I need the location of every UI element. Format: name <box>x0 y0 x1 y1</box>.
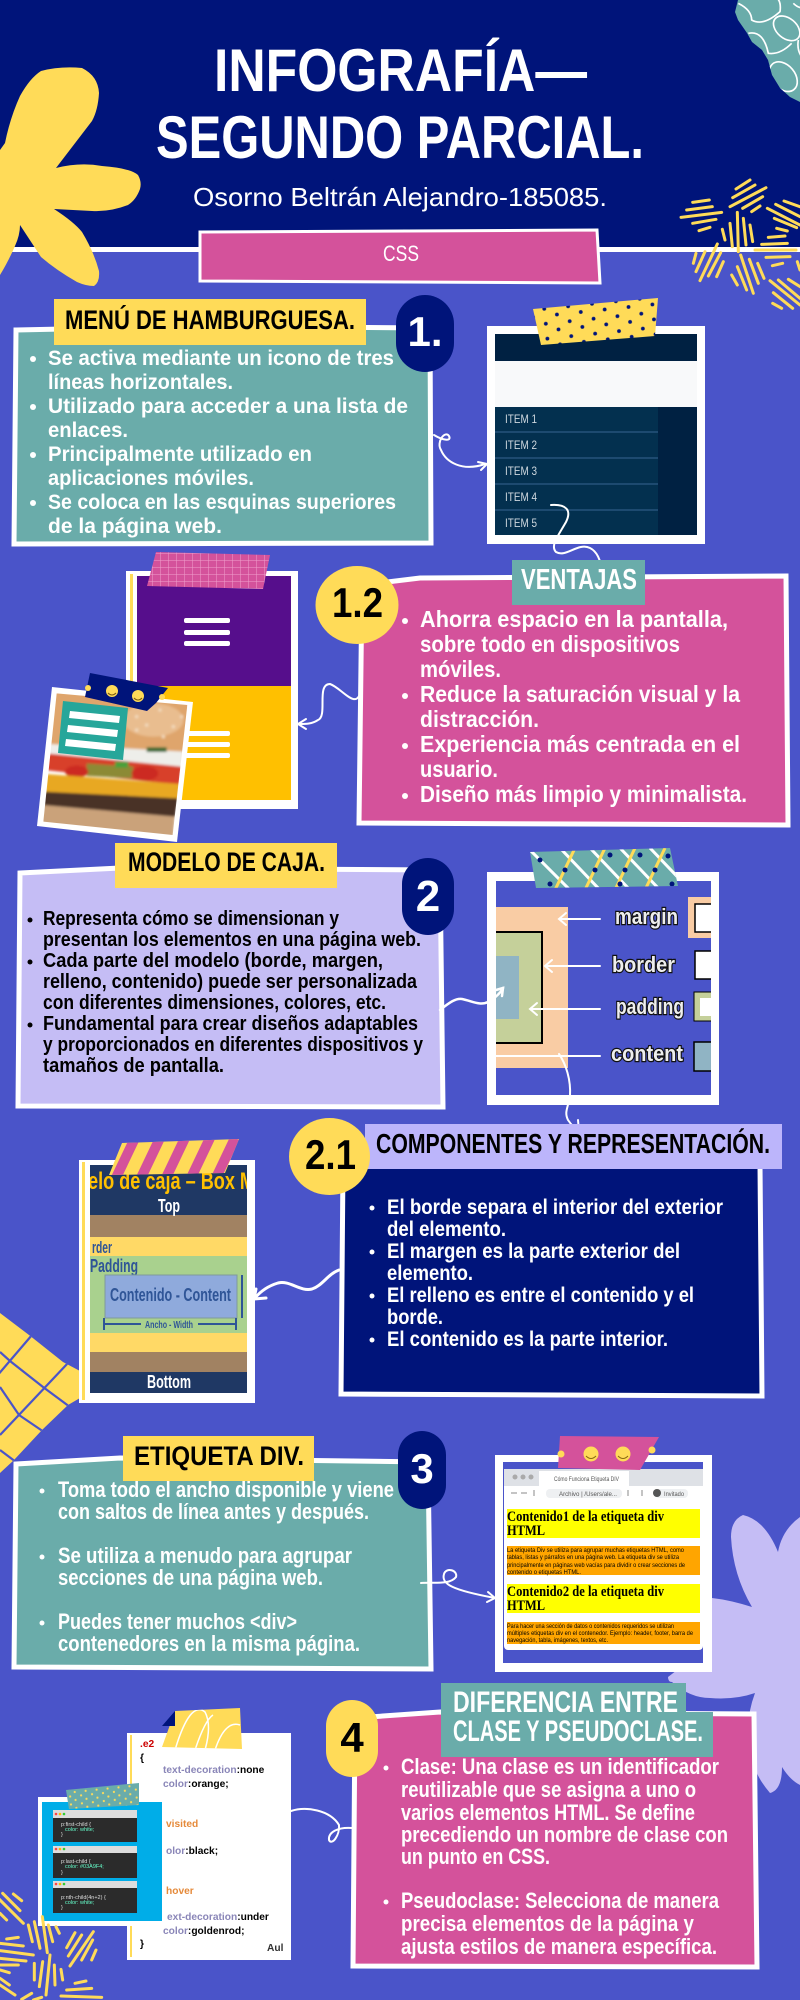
text: menú de hamburguesa bullets: de la página web. <box>48 515 222 538</box>
arrow: menu text to screenshot <box>434 434 487 470</box>
banner: CSS <box>200 230 600 283</box>
image: css code screenshot <box>127 1733 291 1960</box>
text: modelo de caja bullets: Representa cómo se dimensionan y <box>43 908 340 930</box>
decoration: yellow dashes bottom left <box>0 1893 102 2000</box>
image: box model table: Contenido - Content <box>110 1285 231 1305</box>
text: clase y pseudoclase bullets: ajusta estilos de manera específica. <box>401 1934 717 1959</box>
badge: 2.1: 2.1 <box>305 1131 356 1178</box>
image: browser screenshot of div: Cómo Funciona Etiqueta DIV <box>554 1477 619 1483</box>
text: etiqueta div bullets: con saltos de línea antes y después. <box>58 1499 369 1524</box>
text: componentes bullets: borde. <box>387 1306 443 1329</box>
text: clase y pseudoclase bullets: reutilizable que se asigna a uno o <box>401 1777 696 1802</box>
image: box model table: Bottom <box>147 1372 191 1392</box>
text: ventajas bullets: móviles. <box>420 656 501 682</box>
text: clase y pseudoclase bullets: Clase: Una clase es un identificador <box>401 1754 719 1779</box>
text: menú de hamburguesa bullets: enlaces. <box>48 419 128 442</box>
heading: componentes y representación <box>365 1124 782 1169</box>
text: menú de hamburguesa bullets <box>30 347 408 538</box>
text: clase y pseudoclase bullets: varios elementos HTML. Se define <box>401 1800 695 1825</box>
badge: 4 <box>326 1700 378 1777</box>
text: modelo de caja bullets <box>28 908 424 1077</box>
image: browser screenshot of div: HTML <box>507 1523 545 1539</box>
panel: ventajas <box>316 560 788 825</box>
image: burger photo with menu icon <box>37 687 193 842</box>
image: css code screenshot: text-decoration:none <box>163 1765 265 1776</box>
image: menu screenshot: ITEM 2 <box>505 438 537 452</box>
text: componentes bullets <box>370 1196 723 1351</box>
badge: 1.2 <box>316 566 398 644</box>
badge: 1. <box>396 295 454 372</box>
text: ventajas bullets: usuario. <box>420 756 498 782</box>
heading: modelo de caja: MODELO DE CAJA. <box>128 847 325 877</box>
panel: diferencia entre clase y pseudoclase <box>326 1683 757 1967</box>
text: componentes bullets: El margen es la parte exterior del <box>387 1240 680 1263</box>
image: blue code cards: color: #03A9F4; <box>65 1864 104 1870</box>
connector: code screenshot to pseudoclase panel <box>291 1809 352 1842</box>
title <box>156 37 644 171</box>
arrow: menu screenshot to ventajas <box>551 505 606 573</box>
text: componentes bullets: El borde separa el interior del exterior <box>387 1196 723 1219</box>
text: clase y pseudoclase bullets <box>384 1754 728 1959</box>
image: blue code cards: p:nth-child(4n+2) { <box>61 1895 106 1901</box>
tape: pink grid <box>147 552 270 589</box>
badge: 2 <box>402 858 454 935</box>
arrow: modelo to diagram <box>440 988 503 1010</box>
badge: 3: 3 <box>410 1445 434 1492</box>
text: modelo de caja bullets: y proporcionados en diferentes dispositivos y <box>43 1034 424 1056</box>
image: css code screenshot: color:orange; <box>163 1779 229 1790</box>
text: etiqueta div bullets: secciones de una página web. <box>58 1565 323 1590</box>
text: ventajas bullets: distracción. <box>420 706 539 732</box>
image: css code screenshot: .e2 <box>140 1739 154 1750</box>
image: css code screenshot: olor:black; <box>166 1846 218 1857</box>
badge: 1.: 1. <box>407 308 443 355</box>
image: browser screenshot of div: Contenido1 de la etiqueta div <box>507 1509 664 1525</box>
text: menú de hamburguesa bullets: Principalmente utilizado en <box>48 443 312 466</box>
image: blue code cards: p:last-child { <box>61 1859 91 1865</box>
image: browser screenshot of div: Contenido2 de la etiqueta div <box>507 1584 664 1600</box>
tape: pink and yellow stripes <box>109 1139 239 1175</box>
image: browser screenshot of div: contenido o etiquetas HTML. <box>507 1569 581 1576</box>
decoration: yellow flower <box>0 67 141 286</box>
image: css code screenshot: ext-decoration:under <box>167 1912 269 1923</box>
text: menú de hamburguesa bullets: Se coloca en las esquinas superiores <box>48 491 396 514</box>
text: ventajas bullets: sobre todo en dispositivos <box>420 631 680 657</box>
text: clase y pseudoclase bullets: precediendo un nombre de clase con <box>401 1822 728 1847</box>
text: ventajas bullets: Ahorra espacio en la pantalla, <box>420 606 728 632</box>
heading: diferencia entre clase y pseudoclase: DIFERENCIA ENTRE <box>453 1686 678 1719</box>
image: browser screenshot of div: tablas, listas y párrafos en una página web. La etiqueta div se utiliza <box>507 1554 679 1561</box>
image: blue code cards: } <box>61 1832 63 1838</box>
panel: menú de hamburguesa <box>14 295 454 544</box>
text: etiqueta div bullets: contenedores en la misma página. <box>58 1631 360 1656</box>
badge: 2: 2 <box>416 872 440 921</box>
text: clase y pseudoclase bullets: precisa elementos de la página y <box>401 1911 695 1936</box>
image: blue code cards: color: white; <box>65 1900 95 1906</box>
text: clase y pseudoclase bullets: un punto en CSS. <box>401 1844 550 1869</box>
image: box model diagram: border <box>612 952 675 977</box>
image: menu screenshot <box>487 326 705 544</box>
text: modelo de caja bullets: Cada parte del modelo (borde, margen, <box>43 950 383 972</box>
text: componentes bullets: elemento. <box>387 1262 473 1285</box>
text: menú de hamburguesa bullets: aplicaciones móviles. <box>48 467 254 490</box>
image: box model table: Top <box>158 1196 180 1216</box>
tape: polka dots <box>533 298 658 345</box>
tape: yellow scribble <box>162 1708 242 1750</box>
heading: etiqueta div <box>123 1436 314 1481</box>
text: modelo de caja bullets: presentan los elementos en una página web. <box>43 929 421 951</box>
image: browser screenshot of div: Archivo | /Users/ale... <box>559 1492 617 1498</box>
decoration: yellow dashes top right <box>681 180 800 308</box>
tape: teal dots <box>66 1783 139 1809</box>
image: menu screenshot: ITEM 3 <box>505 464 537 478</box>
image: css code screenshot: { <box>140 1753 144 1764</box>
heading: menú de hamburguesa: MENÚ DE HAMBURGUESA. <box>65 304 355 335</box>
image: blue code cards: } <box>61 1870 63 1876</box>
heading: diferencia entre clase y pseudoclase <box>441 1683 713 1757</box>
image: box model table: Ancho - Width <box>145 1320 193 1331</box>
tape: navy smileys <box>85 673 168 711</box>
text: clase y pseudoclase bullets: Pseudoclase: Selecciona de manera <box>401 1888 720 1913</box>
image: box model table: rder <box>92 1238 112 1257</box>
image: menu screenshot: ITEM 1 <box>505 412 537 426</box>
image: browser screenshot of div: HTML <box>507 1598 545 1614</box>
panel: componentes y representación <box>289 1118 782 1396</box>
text: etiqueta div bullets: Toma todo el ancho disponible y viene <box>58 1477 394 1502</box>
image: css code screenshot: color:goldenrod; <box>163 1926 245 1937</box>
subtitle: author: Osorno Beltrán Alejandro-185085. <box>193 182 607 212</box>
image: box model diagram: padding <box>616 994 684 1019</box>
text: ventajas bullets <box>402 606 747 807</box>
image: box model table: elo de caja – Box M <box>88 1168 255 1195</box>
text: menú de hamburguesa bullets: Se activa mediante un icono de tres <box>48 347 394 370</box>
image: hamburger menu phone mock <box>126 571 298 809</box>
text: componentes bullets: El relleno es entre el contenido y el <box>387 1284 694 1307</box>
heading: ventajas <box>512 560 645 605</box>
image: css code screenshot: hover <box>166 1886 194 1897</box>
image: browser screenshot of div: La etiqueta Div se utiliza para agrupar muchas etiquetas HTML, como <box>507 1547 684 1554</box>
panel: modelo de caja <box>18 843 454 1107</box>
text: ventajas bullets: Diseño más limpio y minimalista. <box>420 781 747 807</box>
text: componentes bullets: del elemento. <box>387 1218 506 1241</box>
text: menú de hamburguesa bullets: líneas horizontales. <box>48 371 233 394</box>
badge: 1.2: 1.2 <box>332 579 383 626</box>
arrow: etiqueta div to screenshot <box>421 1570 495 1602</box>
image: browser screenshot of div: Para hacer una sección de datos o contenidos requeridos se utilizan <box>507 1623 674 1630</box>
heading: modelo de caja <box>115 843 337 888</box>
image: box model diagram: margin <box>615 904 678 929</box>
header band <box>0 0 800 252</box>
text: etiqueta div bullets: Se utiliza a menudo para agrupar <box>58 1543 352 1568</box>
image: browser screenshot of div: principalmente en páginas web vacías para dividir o crear secciones de <box>507 1562 685 1569</box>
badge: 2.1 <box>289 1118 370 1195</box>
text: componentes bullets: El contenido es la parte interior. <box>387 1328 668 1351</box>
heading: etiqueta div: ETIQUETA DIV. <box>134 1441 304 1471</box>
panel: etiqueta div <box>14 1431 446 1669</box>
text: modelo de caja bullets: tamaños de pantalla. <box>43 1055 224 1077</box>
image: blue code cards <box>38 1797 162 1926</box>
image: menu screenshot: ITEM 4 <box>505 490 537 504</box>
image: box model table <box>79 1160 255 1403</box>
text: etiqueta div bullets <box>40 1477 394 1656</box>
image: css code screenshot: } <box>140 1939 144 1950</box>
image: browser screenshot of div: Invitado <box>664 1492 685 1498</box>
image: css code screenshot: Aul <box>267 1943 284 1954</box>
heading: menú de hamburguesa <box>54 299 366 345</box>
image: blue code cards: p:first-child { <box>61 1822 91 1828</box>
banner: CSS: CSS <box>383 241 419 266</box>
decoration: teal scalloped blob <box>735 0 800 102</box>
image: browser screenshot of div: múltiples etiquetas div en el contenedor. Ejemplo: header, footer, barra de <box>507 1630 693 1637</box>
image: blue code cards: } <box>61 1905 63 1911</box>
arrow: ventajas to phone mock <box>298 684 361 729</box>
heading: ventajas: VENTAJAS <box>521 564 637 596</box>
text: modelo de caja bullets: relleno, contenido) puede ser personalizada <box>43 971 418 993</box>
image: browser screenshot of div <box>495 1455 712 1672</box>
badge: 4: 4 <box>340 1714 364 1761</box>
arrow: componentes to table <box>254 1270 339 1299</box>
title: INFOGRAFÍA— <box>214 37 587 104</box>
text: ventajas bullets: Experiencia más centrada en el <box>420 731 740 757</box>
text: modelo de caja bullets: Fundamental para crear diseños adaptables <box>43 1013 418 1035</box>
image: box model diagram <box>487 872 725 1105</box>
badge: 3 <box>398 1431 446 1509</box>
title: SEGUNDO PARCIAL. <box>156 104 644 171</box>
text: ventajas bullets: Reduce la saturación visual y la <box>420 681 740 707</box>
arrow: diagram to componentes <box>559 1054 579 1131</box>
tape: pink smileys <box>558 1436 659 1470</box>
decoration: lavender flower <box>668 1515 800 1793</box>
image: blue code cards: color: white; <box>65 1827 95 1833</box>
image: menu screenshot: ITEM 5 <box>505 516 537 530</box>
image: css code screenshot: visited <box>166 1819 198 1830</box>
image: box model diagram: content <box>611 1041 684 1066</box>
image: browser screenshot of div: navegación, tabla, imágenes, textos, etc. <box>507 1637 608 1644</box>
decoration: yellow tiles <box>0 1310 80 1480</box>
tape: diagonal pattern <box>530 848 678 888</box>
text: modelo de caja bullets: con diferentes dimensiones, colores, etc. <box>43 992 386 1014</box>
text: menú de hamburguesa bullets: Utilizado para acceder a una lista de <box>48 395 408 418</box>
text: etiqueta div bullets: Puedes tener muchos <div> <box>58 1609 297 1634</box>
image: box model table: Padding <box>90 1256 138 1276</box>
